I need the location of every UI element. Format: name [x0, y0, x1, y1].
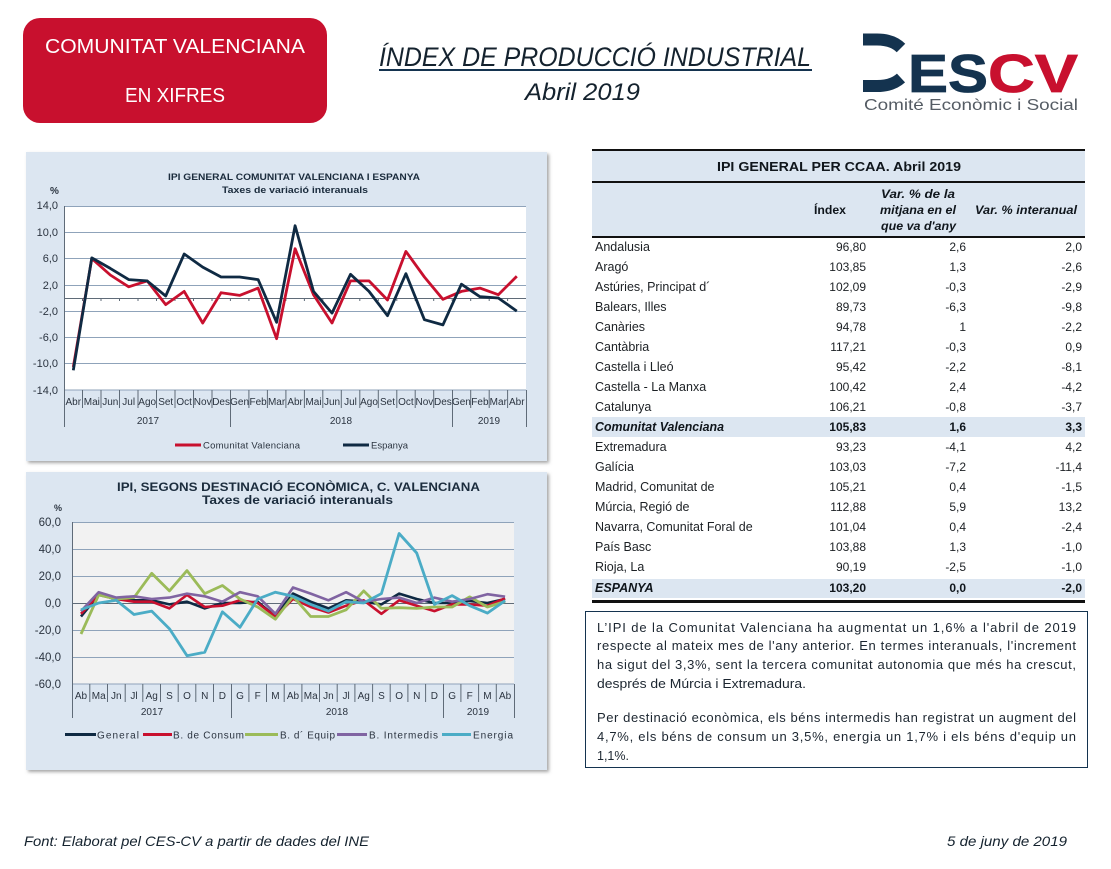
table rows: 1,3 — [949, 540, 966, 554]
table rows: 2,4 — [949, 380, 966, 394]
x axis labels chart 1: Mai — [305, 397, 322, 408]
table rows: Aragó — [595, 260, 628, 274]
table rows: -1,0 — [1061, 560, 1082, 574]
x axis labels chart 1: Abr — [66, 397, 82, 408]
table rows: -3,7 — [1061, 400, 1082, 414]
table rows: 112,88 — [830, 500, 866, 514]
y axis labels chart 1: -6,0 — [39, 332, 58, 344]
legend chart 2: B. Intermedis — [369, 730, 438, 742]
x axis labels chart 1: Nov — [416, 397, 433, 408]
x axis labels chart 1: Oct — [398, 397, 414, 408]
table rows: -2,5 — [945, 560, 966, 574]
table rows: Castella - La Manxa — [595, 380, 706, 394]
x axis labels chart 1: Mai — [84, 397, 100, 408]
table rows: -4,2 — [1061, 380, 1082, 394]
table rows: 1,6 — [949, 420, 966, 434]
x axis labels chart 1: Abr — [287, 397, 304, 408]
x axis labels chart 1: 2017 — [137, 416, 160, 427]
x axis labels chart 1: Mar — [490, 397, 508, 408]
x axis labels chart 1: Ago — [138, 397, 157, 408]
table rows: 103,85 — [829, 260, 866, 274]
x axis labels chart 1: Feb — [249, 397, 267, 408]
x axis labels chart 2: G — [236, 691, 244, 702]
x axis labels chart 2: N — [413, 691, 420, 702]
chart 1 title: % — [50, 186, 59, 197]
table rows: -0,3 — [945, 340, 966, 354]
x axis labels chart 2: Ab — [499, 691, 512, 702]
x axis labels chart 2: O — [183, 691, 191, 702]
x axis labels chart 2: M — [483, 691, 492, 702]
text block: commentary: després de Múrcia i Extremadura. — [597, 676, 806, 691]
y axis labels chart 1: 10,0 — [37, 227, 58, 239]
logo: CES-CV: ES — [908, 44, 988, 104]
x axis labels chart 1: 2018 — [330, 416, 353, 427]
x axis labels chart 2 — [75, 691, 512, 718]
x axis labels chart 1: Nov — [194, 397, 212, 408]
text block: commentary: respecte al mateix mes de l'any anterior. En termes interanuals, l'increment — [597, 638, 1076, 653]
x axis labels chart 1: Gen — [230, 397, 249, 408]
table rows: 3,3 — [1065, 420, 1082, 434]
table rows: -0,8 — [945, 400, 966, 414]
table: IPI general per CCAA — [592, 149, 1085, 603]
table rows: -2,2 — [1061, 320, 1082, 334]
table rows: Balears, Illes — [595, 300, 667, 314]
line: B. de Consum — [81, 595, 505, 616]
line: Espanya — [73, 226, 517, 370]
table rows: 4,2 — [1065, 440, 1082, 454]
table rows: 13,2 — [1059, 500, 1082, 514]
table rows: 101,04 — [829, 520, 866, 534]
text block: commentary: ha sigut del 3,3%, sent la tercera comunitat autonomia que més ha crescut, — [597, 657, 1076, 672]
x axis labels chart 2: 2019 — [467, 707, 490, 718]
footer: date: 5 de juny de 2019 — [947, 833, 1067, 849]
chart 1 title: IPI GENERAL COMUNITAT VALENCIANA I ESPANYA — [168, 172, 420, 183]
x axis labels chart 1: 2019 — [478, 416, 501, 427]
x axis labels chart 2: Jl — [342, 691, 350, 702]
legend chart 1: Espanya — [371, 440, 409, 452]
table rows: -2,6 — [1061, 260, 1082, 274]
x axis labels chart 2: S — [378, 691, 385, 702]
table rows: ESPANYA — [595, 581, 654, 595]
chart 1 title — [50, 172, 420, 197]
table rows: -1,5 — [1061, 480, 1082, 494]
x axis labels chart 2: Ag — [146, 691, 158, 702]
x axis labels chart 1 — [66, 397, 525, 427]
y axis labels chart 1: 14,0 — [37, 200, 58, 212]
table rows: Madrid, Comunitat de — [595, 480, 715, 494]
table rows: Galícia — [595, 460, 634, 474]
y axis labels chart 1: 6,0 — [43, 253, 58, 265]
table rows: -8,1 — [1061, 360, 1082, 374]
x axis labels chart 2: N — [201, 691, 208, 702]
x axis labels chart 2: F — [255, 691, 261, 702]
chart 2 title: Taxes de variació interanuals — [202, 495, 393, 507]
table heading: IPI GENERAL PER CCAA. Abril 2019 — [717, 159, 961, 174]
y axis labels chart 2: -60,0 — [35, 679, 61, 691]
x axis labels chart 2: D — [219, 691, 226, 702]
badge: Comunitat Valenciana en xifres: EN XIFRES — [125, 85, 225, 107]
highlighted row backgrounds — [592, 417, 1085, 603]
y axis labels chart 2: 0,0 — [45, 598, 61, 610]
table rows: 102,09 — [829, 280, 866, 294]
table rows: Múrcia, Regió de — [595, 500, 690, 514]
table heading: Índex — [814, 204, 847, 217]
logo: CES-CV: Comité Econòmic i Social — [864, 97, 1078, 114]
text block: commentary: L’IPI de la Comunitat Valenciana ha augmentat un 1,6% a l'abril de 2019 — [597, 620, 1076, 635]
text block: commentary: 1,1%. — [597, 748, 629, 763]
x axis labels chart 1: Ago — [360, 397, 378, 408]
x axis labels chart 1: Jul — [122, 397, 135, 408]
table heading: Var. % de la — [881, 189, 956, 201]
x axis labels chart 2: Ab — [287, 691, 300, 702]
table rows: 93,23 — [836, 440, 866, 454]
line: Energia — [81, 534, 505, 656]
x axis labels chart 2: Ab — [75, 691, 88, 702]
table rows: 2,6 — [949, 240, 966, 254]
chart 2 title — [54, 481, 480, 513]
logo: CES-CV: CV — [988, 44, 1078, 104]
legend chart 2 — [65, 730, 513, 742]
chart 2 title: IPI, SEGONS DESTINACIÓ ECONÒMICA, C. VALENCIANA — [117, 481, 480, 494]
text block: commentary: Per destinació econòmica, els béns intermedis han registrat un augment del — [597, 710, 1076, 725]
x axis labels chart 1: Jun — [324, 397, 340, 408]
x axis labels chart 1: Set — [158, 397, 173, 408]
line: B. d'Equip — [81, 571, 505, 634]
legend chart 2: General — [97, 730, 139, 742]
table rows: 105,21 — [829, 480, 866, 494]
table rows: 1 — [959, 320, 966, 334]
y axis labels chart 2: 20,0 — [39, 571, 61, 583]
x axis labels chart 1: Oct — [176, 397, 192, 408]
x axis labels chart 2: 2017 — [141, 707, 164, 718]
y axis labels chart 2: -20,0 — [35, 625, 61, 637]
legend chart 2: B. d´ Equip — [280, 730, 335, 742]
table rows: -11,4 — [1056, 460, 1082, 474]
x axis labels chart 2: Ma — [92, 691, 106, 702]
y axis labels chart 2: 60,0 — [39, 517, 61, 529]
table heading: mitjana en el — [880, 205, 957, 217]
y axis labels chart 2 — [35, 517, 61, 691]
line: Comunitat Valenciana — [73, 249, 517, 367]
x axis labels chart 1: Mar — [268, 397, 286, 408]
table rows: Cantàbria — [595, 340, 649, 354]
x axis labels chart 2: G — [448, 691, 456, 702]
table rows: Extremadura — [595, 440, 667, 454]
table rows: -2,4 — [1061, 520, 1082, 534]
table rows: -7,2 — [945, 460, 966, 474]
table rows: -9,8 — [1061, 300, 1082, 314]
table rows: 95,42 — [836, 360, 866, 374]
chart 2 title: % — [54, 503, 62, 513]
table rows: 0,4 — [949, 480, 966, 494]
logo: CES-CV — [863, 40, 1078, 114]
table rows: País Basc — [595, 540, 651, 554]
x axis labels chart 1: Abr — [509, 397, 525, 408]
y axis labels chart 1 — [33, 200, 58, 397]
table rows: -6,3 — [945, 300, 966, 314]
table rows: 103,03 — [829, 460, 866, 474]
table rows: Navarra, Comunitat Foral de — [595, 520, 753, 534]
table rows: 1,3 — [949, 260, 966, 274]
table rows: 100,42 — [829, 380, 866, 394]
table rows: 103,20 — [829, 581, 866, 595]
text block: commentary — [586, 612, 1088, 768]
x axis labels chart 2: Ag — [358, 691, 370, 702]
table rows: -1,0 — [1061, 540, 1082, 554]
line: General — [81, 594, 505, 616]
table rows: Catalunya — [595, 400, 651, 414]
x axis labels chart 2: M — [271, 691, 280, 702]
table rows: 90,19 — [836, 560, 866, 574]
legend chart 2: Energia — [473, 730, 513, 742]
x axis labels chart 1: Set — [380, 397, 395, 408]
table rows: -2,0 — [1061, 581, 1082, 595]
title: ÍNDEX DE PRODUCCIÓ INDUSTRIAL — [379, 41, 811, 72]
x axis labels chart 2: 2018 — [326, 707, 349, 718]
table heading: que va d'any — [881, 221, 957, 233]
x axis labels chart 2: F — [467, 691, 473, 702]
table rows: -2,9 — [1061, 280, 1082, 294]
x axis labels chart 1: Des — [434, 397, 452, 408]
table rows — [595, 240, 1082, 595]
x axis labels chart 2: Jn — [323, 691, 334, 702]
title: Abril 2019 — [523, 79, 640, 106]
x axis labels chart 1: Gen — [452, 397, 471, 408]
x axis labels chart 2: Ma — [304, 691, 318, 702]
table rows: 0,9 — [1065, 340, 1082, 354]
x axis labels chart 1: Jul — [344, 397, 357, 408]
table rows: 0,4 — [949, 520, 966, 534]
table rows: 94,78 — [836, 320, 866, 334]
x axis labels chart 2: S — [166, 691, 173, 702]
legend chart 1 — [175, 440, 409, 452]
chart 1 title: Taxes de variació interanuals — [222, 185, 368, 196]
table rows: Comunitat Valenciana — [595, 420, 724, 434]
x axis labels chart 1: Feb — [471, 397, 489, 408]
y axis labels chart 1: -14,0 — [33, 385, 58, 397]
x axis labels chart 2: Jl — [130, 691, 138, 702]
table rows: Andalusia — [595, 240, 650, 254]
badge: Comunitat Valenciana en xifres: COMUNITAT VALENCIANA — [45, 36, 306, 58]
x axis labels chart 1: Des — [212, 397, 230, 408]
y axis labels chart 1: -10,0 — [33, 358, 58, 370]
y axis labels chart 1: 2,0 — [43, 280, 58, 292]
y axis labels chart 2: -40,0 — [35, 652, 61, 664]
legend chart 2: B. de Consum — [173, 730, 244, 742]
panel: line chart by economic destination — [26, 472, 547, 770]
table rows: -2,2 — [945, 360, 966, 374]
table rows: -0,3 — [945, 280, 966, 294]
table rows: 117,21 — [830, 340, 866, 354]
x axis labels chart 2: D — [431, 691, 438, 702]
table rows: 96,80 — [836, 240, 866, 254]
legend chart 1: Comunitat Valenciana — [203, 440, 301, 452]
table rows: 105,83 — [829, 420, 866, 434]
x axis labels chart 1: Jun — [102, 397, 118, 408]
table rows: Rioja, La — [595, 560, 644, 574]
table rows: Castella i Lleó — [595, 360, 674, 374]
table heading: Var. % interanual — [975, 205, 1078, 217]
y axis labels chart 2: 40,0 — [39, 544, 61, 556]
table rows: -4,1 — [945, 440, 966, 454]
table rows: 106,21 — [829, 400, 866, 414]
table rows: 0,0 — [949, 581, 966, 595]
footer: source: Font: Elaborat pel CES-CV a partir de dades del INE — [24, 833, 370, 849]
title — [379, 41, 812, 106]
table heading — [592, 149, 1085, 238]
table rows: 103,88 — [829, 540, 866, 554]
x axis labels chart 2: O — [395, 691, 403, 702]
line: B. Intermedis — [81, 588, 505, 614]
text block: commentary: 4,7%, els béns de consum un 3,5%, energia un 1,7% i els béns d'equip un — [597, 729, 1076, 744]
badge: Comunitat Valenciana en xifres — [23, 18, 327, 123]
table rows: 2,0 — [1065, 240, 1082, 254]
x axis labels chart 2: Jn — [111, 691, 122, 702]
table rows: Canàries — [595, 320, 645, 334]
y axis labels chart 1: -2,0 — [39, 306, 58, 318]
table rows: 5,9 — [949, 500, 966, 514]
table rows: 89,73 — [836, 300, 866, 314]
panel: line chart general — [26, 152, 547, 461]
table rows: Astúries, Principat d´ — [595, 280, 710, 294]
